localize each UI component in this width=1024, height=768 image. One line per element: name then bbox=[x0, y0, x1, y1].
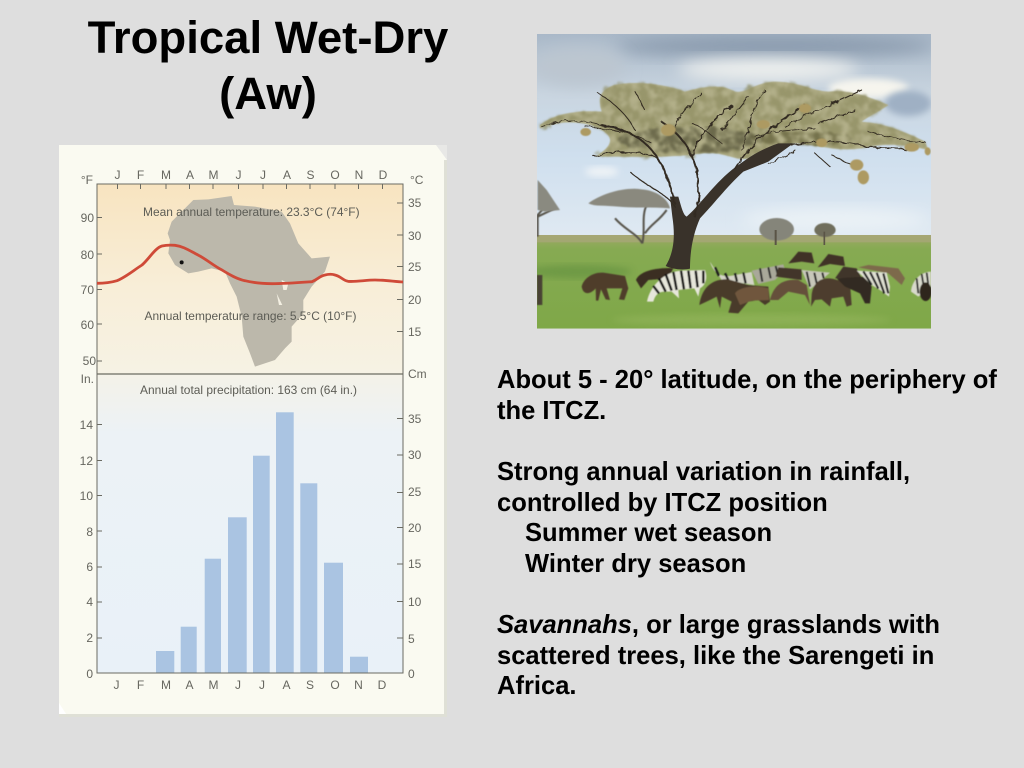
right precipitation axis labels bbox=[408, 412, 422, 681]
left temperature axis labels bbox=[81, 173, 96, 368]
title bbox=[88, 12, 448, 119]
title: Tropical Wet-Dry bbox=[88, 12, 448, 63]
herd of wildebeest and zebras bbox=[537, 252, 932, 313]
clouds bbox=[532, 35, 935, 231]
bottom month labels: J bbox=[259, 678, 265, 692]
top month labels: F bbox=[137, 168, 144, 182]
savanna photo bbox=[525, 34, 935, 329]
right precipitation axis labels: 10 bbox=[408, 595, 422, 609]
left precipitation axis labels: 8 bbox=[86, 525, 93, 539]
right precipitation axis labels: 25 bbox=[408, 485, 422, 499]
right precipitation axis labels: 20 bbox=[408, 521, 422, 535]
left precipitation axis labels: In. bbox=[81, 372, 94, 386]
left precipitation axis labels: 0 bbox=[86, 667, 93, 681]
right temperature axis labels: 35 bbox=[408, 196, 422, 210]
top month labels: M bbox=[161, 168, 171, 182]
left precipitation axis labels bbox=[80, 372, 94, 681]
bottom month labels: M bbox=[161, 678, 171, 692]
chart annotations: Annual total precipitation: 163 cm (64 in.) bbox=[140, 383, 357, 397]
right temperature axis labels: 30 bbox=[408, 229, 422, 243]
left temperature axis labels: 50 bbox=[83, 354, 96, 368]
text block: rainfall variation: Summer wet season bbox=[525, 519, 772, 547]
right zebra bbox=[857, 271, 890, 297]
temperature plot background bbox=[97, 184, 403, 374]
top month labels: O bbox=[330, 168, 340, 182]
grass bbox=[537, 235, 931, 329]
right precipitation axis labels: 5 bbox=[408, 632, 415, 646]
text block: latitude: About 5 - 20° latitude, on the periphery of bbox=[497, 366, 997, 394]
precipitation plot background bbox=[97, 374, 403, 673]
left precipitation axis labels: 2 bbox=[86, 631, 93, 645]
acacia trunk and branches bbox=[542, 90, 925, 269]
top month labels bbox=[114, 168, 388, 182]
top month labels: S bbox=[306, 168, 315, 182]
title: (Aw) bbox=[219, 68, 317, 119]
temperature curve bbox=[97, 245, 403, 284]
top month labels: M bbox=[208, 168, 218, 182]
top month labels: J bbox=[260, 168, 266, 182]
right precipitation axis labels: 35 bbox=[408, 412, 422, 426]
left temperature axis labels: 80 bbox=[81, 248, 94, 262]
top month labels: A bbox=[283, 168, 291, 182]
right precipitation axis labels: 30 bbox=[408, 448, 422, 462]
bottom month labels: O bbox=[330, 678, 340, 692]
text block: rainfall variation: Strong annual variation in rainfall, bbox=[497, 458, 910, 486]
left temperature axis labels: °F bbox=[81, 173, 93, 187]
right temperature axis labels bbox=[408, 173, 427, 381]
text block: savannahs bbox=[497, 611, 940, 700]
top month labels: J bbox=[236, 168, 242, 182]
text block: latitude bbox=[497, 366, 997, 425]
bottom month labels: M bbox=[208, 678, 218, 692]
text block: savannahs: Africa. bbox=[497, 672, 577, 700]
left precipitation axis labels: 10 bbox=[80, 489, 93, 503]
left temperature axis labels: 90 bbox=[81, 211, 94, 225]
text block: rainfall variation: controlled by ITCZ position bbox=[497, 489, 828, 517]
left precipitation axis labels: 6 bbox=[86, 560, 93, 574]
right wildebeest group bbox=[811, 278, 852, 307]
front zebra bbox=[647, 270, 706, 302]
sky bbox=[537, 34, 931, 236]
middle wildebeest bbox=[699, 279, 770, 313]
back row bbox=[710, 252, 905, 289]
card corner folds bbox=[436, 145, 447, 160]
bottom month labels: A bbox=[282, 678, 291, 692]
bottom month labels: A bbox=[185, 678, 194, 692]
left temperature axis labels: 70 bbox=[81, 283, 94, 297]
edge animals bbox=[911, 272, 931, 297]
left precipitation axis labels: 14 bbox=[80, 418, 93, 432]
top month labels: N bbox=[355, 168, 363, 182]
top month labels: D bbox=[379, 168, 388, 182]
right precipitation axis labels: 15 bbox=[408, 557, 422, 571]
right temperature axis labels: 15 bbox=[408, 325, 422, 339]
bottom month labels bbox=[114, 678, 387, 692]
bottom month labels: S bbox=[306, 678, 314, 692]
map of Africa bbox=[168, 196, 330, 367]
left temperature axis labels: 60 bbox=[81, 318, 94, 332]
text block: savannahs: scattered trees, like the Sarengeti in bbox=[497, 642, 934, 670]
right temperature axis labels: Cm bbox=[408, 367, 427, 381]
chart annotations: Mean annual temperature: 23.3°C (74°F) bbox=[143, 205, 360, 219]
distant trees bbox=[538, 180, 836, 245]
chart annotations: Annual temperature range: 5.5°C (10°F) bbox=[144, 309, 356, 323]
bottom month labels: J bbox=[114, 678, 120, 692]
climate chart panel bbox=[59, 34, 931, 714]
text block: rainfall variation: Winter dry season bbox=[525, 550, 746, 578]
bottom month labels: D bbox=[378, 678, 387, 692]
precipitation bars bbox=[156, 412, 368, 673]
top month labels: J bbox=[114, 168, 120, 182]
bottom month labels: F bbox=[137, 678, 144, 692]
chart annotations bbox=[140, 205, 360, 397]
left precipitation axis labels: 12 bbox=[80, 454, 93, 468]
right temperature axis labels: °C bbox=[410, 173, 424, 187]
weaver nests bbox=[580, 104, 931, 184]
right temperature axis labels: 25 bbox=[408, 260, 422, 274]
plot frame and axes bbox=[97, 184, 403, 673]
wildebeest behind front zebra bbox=[636, 268, 673, 288]
bottom month labels: J bbox=[235, 678, 241, 692]
text block: savannahs: Savannahs, or large grasslands with bbox=[497, 611, 940, 639]
bottom month labels: N bbox=[354, 678, 363, 692]
top month labels: A bbox=[186, 168, 194, 182]
right precipitation axis labels: 0 bbox=[408, 667, 415, 681]
chart card background bbox=[59, 145, 447, 717]
text block: latitude: the ITCZ. bbox=[497, 397, 606, 425]
right temperature axis labels: 20 bbox=[408, 293, 422, 307]
left precipitation axis labels: 4 bbox=[86, 595, 93, 609]
acacia canopy bbox=[540, 82, 928, 159]
centre-right wildebeest bbox=[770, 280, 810, 305]
left wildebeest bbox=[582, 273, 628, 301]
text block: rainfall variation bbox=[497, 458, 910, 578]
